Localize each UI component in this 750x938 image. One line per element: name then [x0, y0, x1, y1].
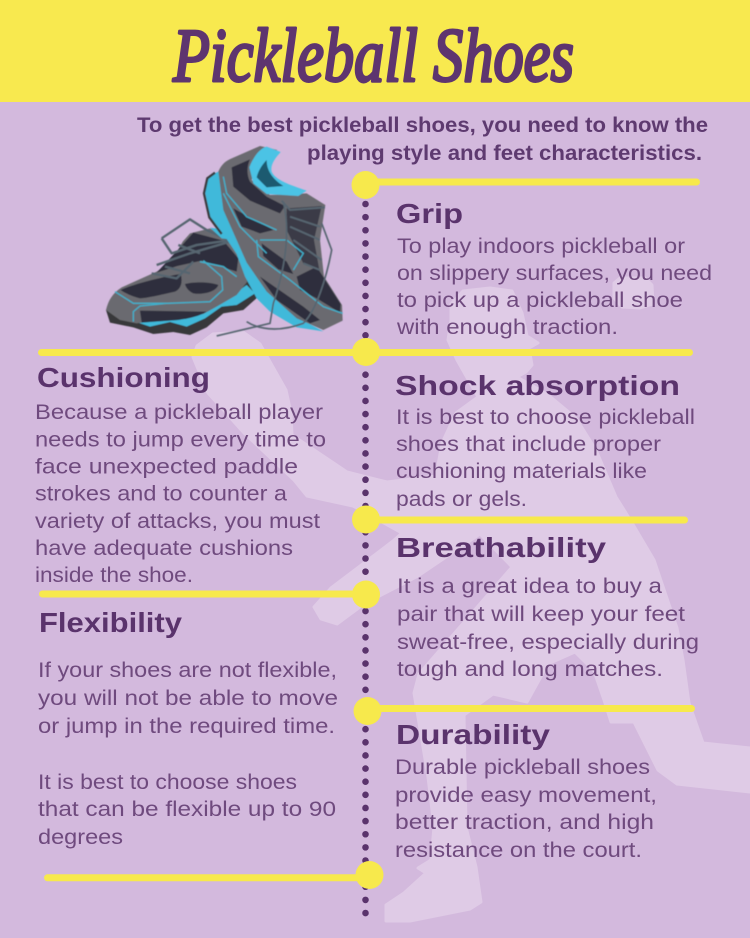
body: Durability: provide easy movement, — [395, 784, 657, 807]
body: Durability: better traction, and high — [395, 811, 654, 834]
body: Flexibility: you will not be able to move — [38, 687, 338, 710]
heading: Flexibility: Flexibility — [39, 607, 182, 638]
heading: Cushioning: Cushioning — [37, 362, 210, 393]
panel: Grip — [396, 198, 712, 339]
body: Flexibility: or jump in the required time. — [38, 715, 335, 738]
body: Breathability: pair that will keep your feet — [397, 603, 685, 626]
body: Breathability — [397, 575, 699, 681]
body: Cushioning — [35, 401, 326, 587]
icon: pair of running shoes — [106, 146, 343, 336]
body: Shock absorption: cushioning materials like — [396, 460, 647, 483]
background: player silhouette — [193, 278, 750, 921]
heading: Breathability: Breathability — [396, 532, 607, 563]
body: Grip — [396, 235, 712, 339]
heading: Grip: Grip — [396, 198, 463, 229]
panel: Cushioning — [35, 362, 326, 587]
body: Grip: To play indoors pickleball or — [397, 235, 685, 258]
right shoe — [204, 146, 343, 336]
body: Breathability: sweat-free, especially during — [397, 631, 699, 654]
body: Shock absorption: shoes that include proper — [396, 433, 661, 456]
body: Cushioning: variety of attacks, you must — [35, 510, 320, 533]
body: Flexibility — [38, 659, 338, 849]
panel: Breathability — [396, 532, 699, 681]
intro text: To get the best pickleball shoes, you need to know the — [137, 114, 708, 137]
title: Pickleball Shoes — [172, 14, 574, 98]
connector lines and nodes — [38, 171, 700, 889]
body: Flexibility: degrees — [38, 826, 123, 849]
body: Grip: with enough traction. — [396, 316, 618, 339]
panel: Durability — [395, 719, 657, 862]
body: Breathability: It is a great idea to buy a — [397, 575, 662, 598]
body: Shock absorption — [396, 406, 695, 511]
left shoe — [106, 219, 258, 335]
dotted timeline — [362, 204, 369, 914]
body: Cushioning: have adequate cushions — [35, 537, 293, 560]
body: Durability: Durable pickleball shoes — [395, 756, 650, 779]
body: Flexibility: that can be flexible up to 90 — [38, 798, 336, 821]
body: Cushioning: Because a pickleball player — [35, 401, 323, 424]
panel: Flexibility — [38, 607, 338, 849]
body: Grip: to pick up a pickleball shoe — [397, 289, 683, 312]
panel: Shock absorption — [395, 370, 695, 511]
body: Durability — [395, 756, 657, 862]
heading: Durability: Durability — [396, 719, 550, 750]
body: Durability: resistance on the court. — [395, 839, 642, 862]
body: Cushioning: strokes and to counter a — [35, 482, 287, 506]
intro text: playing style and feet characteristics. — [307, 142, 702, 165]
body: Cushioning: face unexpected paddle — [35, 456, 298, 478]
body: Cushioning: inside the shoe. — [35, 564, 193, 587]
body: Flexibility: It is best to choose shoes — [38, 771, 297, 794]
header band — [0, 0, 750, 102]
body: Shock absorption: It is best to choose pickleball — [396, 406, 695, 429]
body: Grip: on slippery surfaces, you need — [397, 262, 712, 285]
body: Flexibility: If your shoes are not flexible, — [38, 659, 337, 682]
heading: Shock absorption: Shock absorption — [395, 370, 680, 401]
body: Shock absorption: pads or gels. — [396, 488, 527, 511]
body: Breathability: tough and long matches. — [397, 658, 663, 681]
body: Cushioning: needs to jump every time to — [35, 428, 326, 452]
intro text — [137, 114, 708, 165]
